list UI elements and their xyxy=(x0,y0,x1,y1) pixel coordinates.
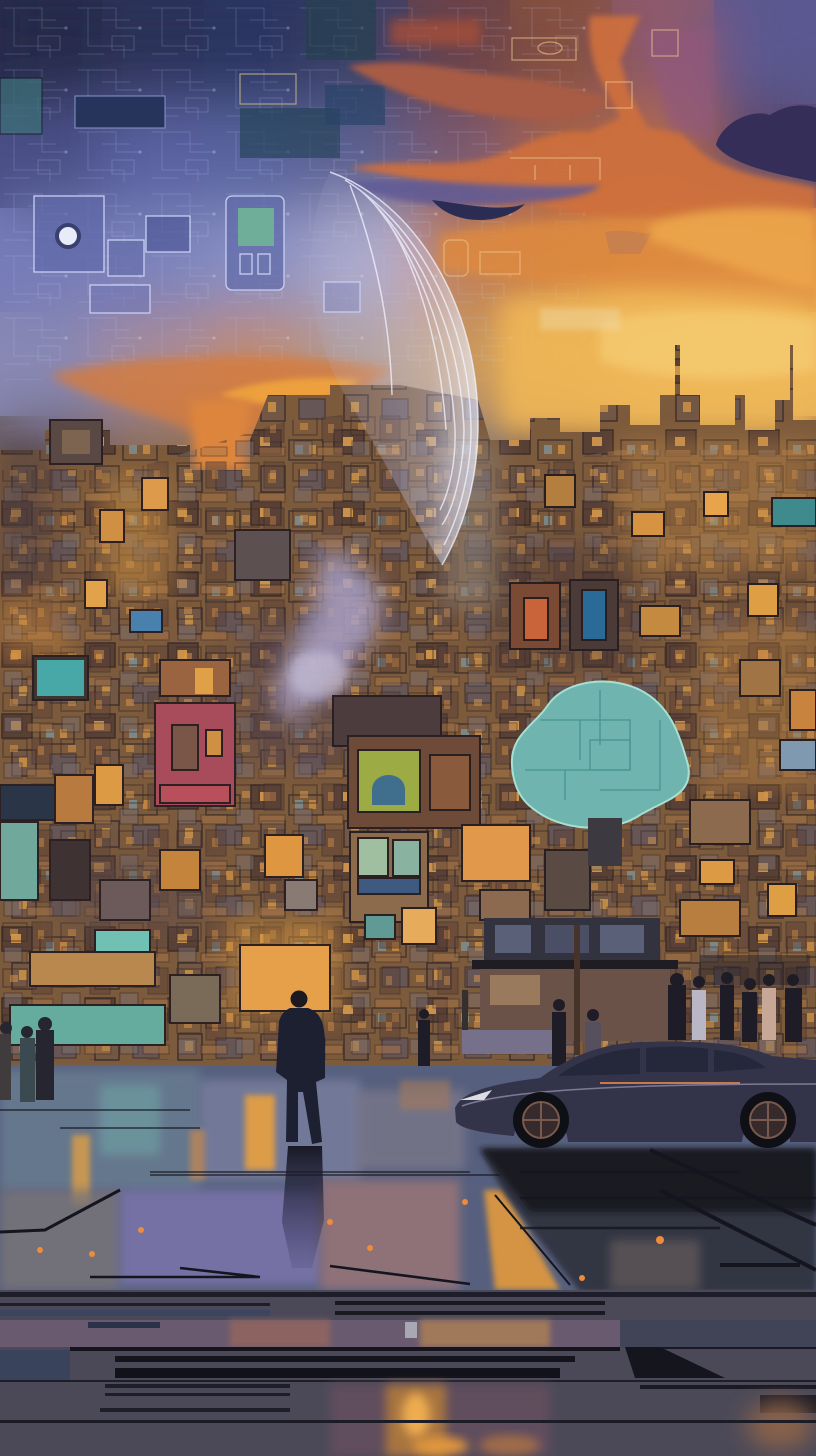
circuit overlay on the sky xyxy=(0,0,600,380)
city mass xyxy=(0,345,816,1070)
kiosk structure xyxy=(462,918,678,1055)
sports car xyxy=(455,1041,816,1148)
wet plaza floor xyxy=(0,1066,816,1292)
lower terraces with reflections xyxy=(0,1290,816,1456)
man reflection xyxy=(282,1146,324,1268)
dark circuit block at top left xyxy=(0,0,385,158)
dome: translucent sphere xyxy=(311,172,478,565)
teal holographic brain cloud xyxy=(512,682,689,866)
building windows: left district xyxy=(0,420,330,1045)
people at left xyxy=(0,1017,54,1102)
framed gallery windows: right district xyxy=(480,475,816,936)
crowd at right xyxy=(418,955,810,1066)
clouds xyxy=(50,16,816,470)
central building with green window xyxy=(333,696,530,944)
man silhouette xyxy=(276,990,325,1144)
small circuit glyphs on clouds xyxy=(444,30,678,276)
smoke plume xyxy=(276,545,382,722)
tinted district patches xyxy=(0,440,816,1020)
panel devices in sky xyxy=(34,196,360,313)
